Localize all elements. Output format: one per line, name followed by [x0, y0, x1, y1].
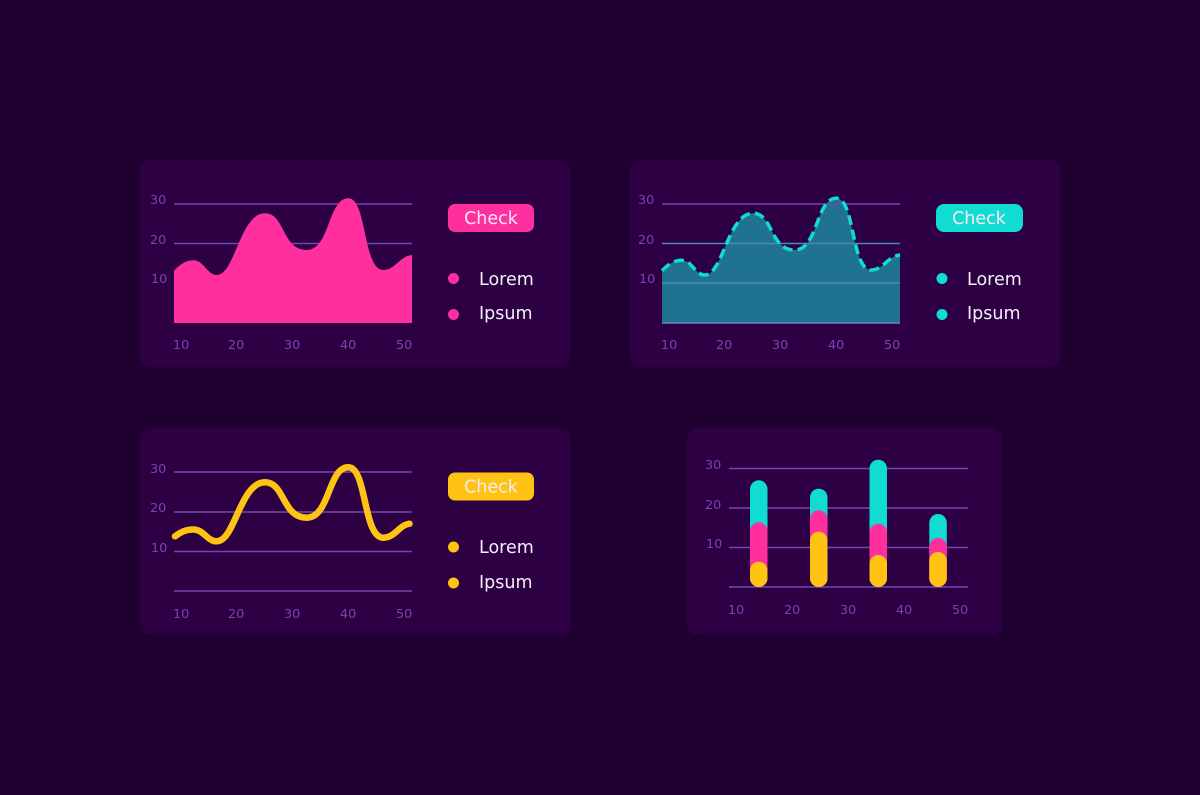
check button	[448, 472, 534, 500]
bar 4	[929, 514, 947, 587]
x axis labels	[728, 603, 968, 618]
y axis labels: 20	[150, 501, 166, 516]
y axis labels: 10	[151, 272, 167, 287]
pink area	[174, 198, 412, 323]
y axis labels: 20	[150, 233, 166, 248]
panel: teal dashed area chart	[629, 160, 1060, 367]
x axis labels: 30	[284, 607, 300, 622]
panel: pink area chart	[140, 160, 571, 367]
x axis labels: 20	[784, 603, 800, 618]
bar 3	[870, 460, 887, 587]
x axis labels: 40	[340, 607, 356, 622]
y axis labels: 10	[706, 537, 722, 552]
dashed teal line	[662, 198, 900, 275]
x axis labels: 20	[228, 607, 244, 622]
x axis labels: 40	[896, 603, 912, 618]
y axis labels: 30	[150, 193, 166, 208]
legend: Lorem	[479, 538, 534, 558]
y axis labels: 20	[638, 233, 654, 248]
legend: Ipsum	[479, 304, 533, 324]
check button: Check	[952, 209, 1007, 229]
panel: yellow line chart	[140, 428, 571, 635]
bar 1	[750, 480, 768, 587]
y axis labels	[150, 462, 167, 556]
y axis labels	[638, 193, 655, 287]
y axis labels	[150, 193, 167, 287]
y axis labels: 30	[150, 462, 166, 477]
x axis labels	[173, 607, 412, 622]
legend: Ipsum	[967, 304, 1021, 324]
legend	[448, 270, 534, 324]
yellow line	[175, 467, 410, 541]
bar 2	[810, 489, 828, 587]
y axis labels: 30	[638, 193, 654, 208]
x axis labels: 50	[396, 607, 412, 622]
x axis labels: 50	[952, 603, 968, 618]
y axis labels: 10	[639, 272, 655, 287]
x axis labels	[173, 338, 412, 353]
check button: Check	[464, 209, 519, 229]
check button: Check	[464, 478, 519, 498]
x axis labels: 10	[173, 338, 189, 353]
teal area	[662, 198, 900, 323]
y axis labels	[705, 458, 722, 552]
x axis labels: 30	[840, 603, 856, 618]
x axis labels: 50	[884, 338, 900, 353]
x axis labels: 20	[716, 338, 732, 353]
x axis labels: 10	[661, 338, 677, 353]
check button	[448, 204, 534, 232]
x axis labels: 10	[173, 607, 189, 622]
y axis labels: 10	[151, 541, 167, 556]
legend	[936, 270, 1022, 324]
y axis labels: 30	[705, 458, 721, 473]
check button	[936, 204, 1023, 232]
x axis labels: 20	[228, 338, 244, 353]
legend: Ipsum	[479, 573, 533, 593]
panel: stacked bar chart	[687, 428, 1002, 635]
x axis labels: 10	[728, 603, 744, 618]
y axis labels: 20	[705, 498, 721, 513]
x axis labels: 30	[772, 338, 788, 353]
x axis labels: 40	[828, 338, 844, 353]
x axis labels	[661, 338, 900, 353]
legend	[448, 538, 534, 593]
legend: Lorem	[967, 270, 1022, 290]
x axis labels: 30	[284, 338, 300, 353]
legend: Lorem	[479, 270, 534, 290]
x axis labels: 50	[396, 338, 412, 353]
x axis labels: 40	[340, 338, 356, 353]
